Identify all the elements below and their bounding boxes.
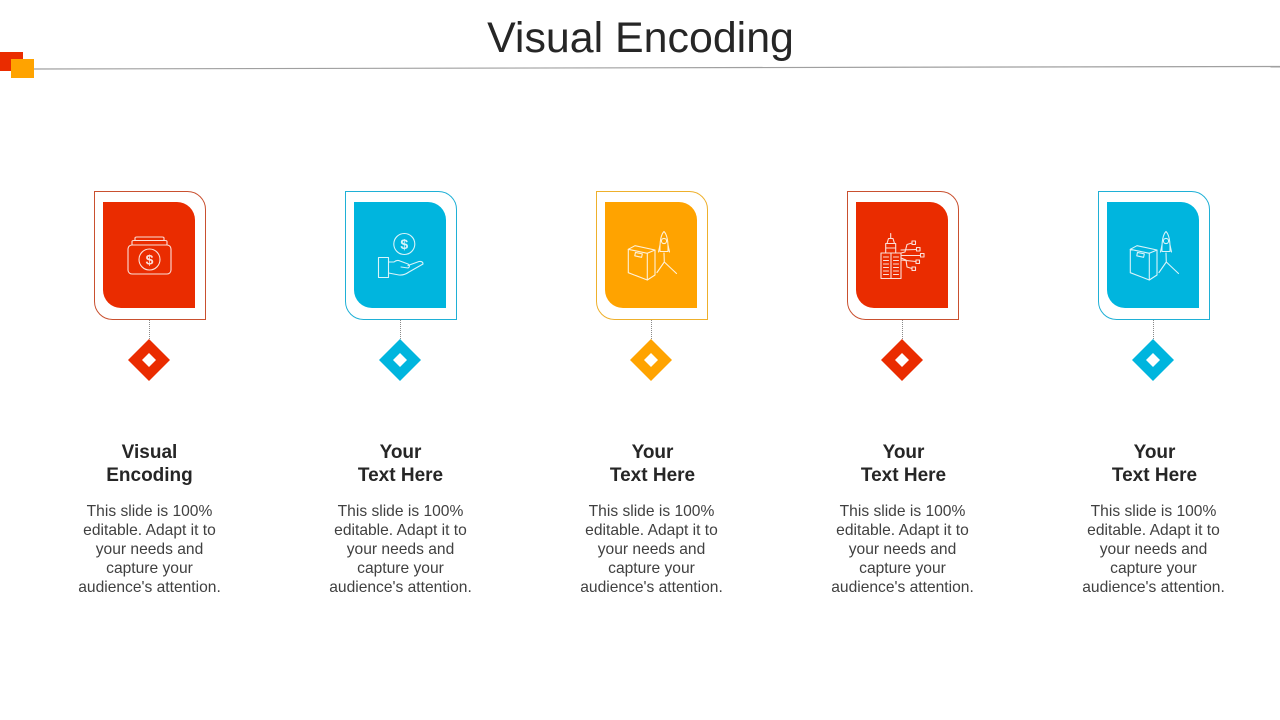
body text 2: your needs and [347, 541, 454, 558]
body text 1: editable. Adapt it to [83, 522, 216, 539]
body text 5: editable. Adapt it to [1087, 522, 1220, 539]
body text 3: your needs and [598, 541, 705, 558]
header rule [34, 66, 1280, 69]
heading 2: Your [380, 442, 422, 463]
card outline 4 [848, 192, 958, 320]
body text 5: your needs and [1100, 541, 1207, 558]
heading 3: Your [632, 442, 674, 463]
card fill 3 [605, 202, 697, 308]
connector 3 [650, 320, 652, 340]
card fill 4 [856, 202, 948, 308]
body text 2: audience's attention. [329, 579, 472, 596]
icon: money stack: $ [146, 252, 154, 268]
body text 5: audience's attention. [1082, 579, 1225, 596]
body text 3: audience's attention. [580, 579, 723, 596]
icon: money stack [128, 237, 171, 274]
body text 4: This slide is 100% [840, 503, 965, 520]
body text 5: This slide is 100% [1091, 503, 1216, 520]
diamond marker 3 [630, 339, 672, 381]
connector 4 [902, 320, 904, 340]
body text 3: capture your [608, 560, 695, 577]
card outline 2 [346, 192, 456, 320]
body text 2: This slide is 100% [338, 503, 463, 520]
card fill 1 [103, 202, 195, 308]
connector 2 [400, 320, 402, 340]
connector 1 [148, 320, 150, 340]
body text 1: This slide is 100% [87, 503, 212, 520]
heading 5: Your [1134, 442, 1176, 463]
title: Visual Encoding [487, 14, 794, 62]
body text 1: capture your [106, 560, 193, 577]
header accent squares [0, 52, 34, 78]
diamond marker 5 [1132, 339, 1174, 381]
column 4: your text here [831, 192, 974, 596]
body text 4: capture your [859, 560, 946, 577]
icon: hand with coin: $ [400, 236, 408, 252]
heading 4: Your [883, 442, 925, 463]
icon: box and rocket [1130, 232, 1178, 280]
card fill 5 [1107, 202, 1199, 308]
heading 5: Text Here [1112, 465, 1197, 486]
icon: box and rocket [628, 232, 676, 280]
body text 2: capture your [357, 560, 444, 577]
column 3: your text here [580, 192, 723, 596]
diamond marker 4 [881, 339, 923, 381]
body text 3: editable. Adapt it to [585, 522, 718, 539]
card fill 2 [354, 202, 446, 308]
body text 5: capture your [1110, 560, 1197, 577]
body text 3: This slide is 100% [589, 503, 714, 520]
body text 2: editable. Adapt it to [334, 522, 467, 539]
heading 3: Text Here [610, 465, 695, 486]
diamond marker 2 [379, 339, 421, 381]
column 5: your text here [1082, 192, 1225, 596]
card outline 5 [1098, 192, 1210, 320]
column 1: visual encoding [78, 192, 221, 596]
body text 1: your needs and [96, 541, 203, 558]
body text 4: audience's attention. [831, 579, 974, 596]
column 2: your text here [329, 192, 472, 596]
heading 2: Text Here [358, 465, 443, 486]
heading 1: Encoding [106, 465, 193, 486]
body text 4: editable. Adapt it to [836, 522, 969, 539]
connector 5 [1152, 320, 1154, 340]
heading 4: Text Here [861, 465, 946, 486]
body text 4: your needs and [849, 541, 956, 558]
card outline 3 [596, 192, 708, 320]
icon: hand with coin [378, 234, 423, 278]
diamond marker 1 [128, 339, 170, 381]
card outline 1 [94, 192, 206, 320]
icon: networked building [881, 234, 924, 278]
heading 1: Visual [122, 442, 177, 463]
body text 1: audience's attention. [78, 579, 221, 596]
